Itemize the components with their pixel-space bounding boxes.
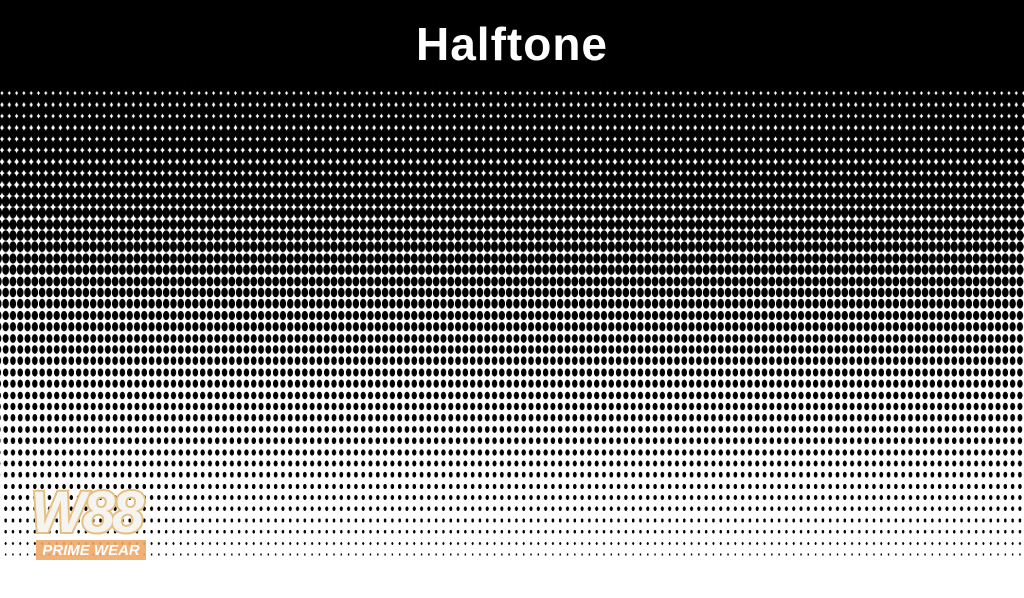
title: Halftone xyxy=(416,18,608,70)
logo text W88: W88 xyxy=(31,480,145,545)
header bar xyxy=(0,0,1024,84)
logo band: PRIME WEAR xyxy=(42,542,140,559)
logo: W88 Prime Wear xyxy=(31,480,146,560)
